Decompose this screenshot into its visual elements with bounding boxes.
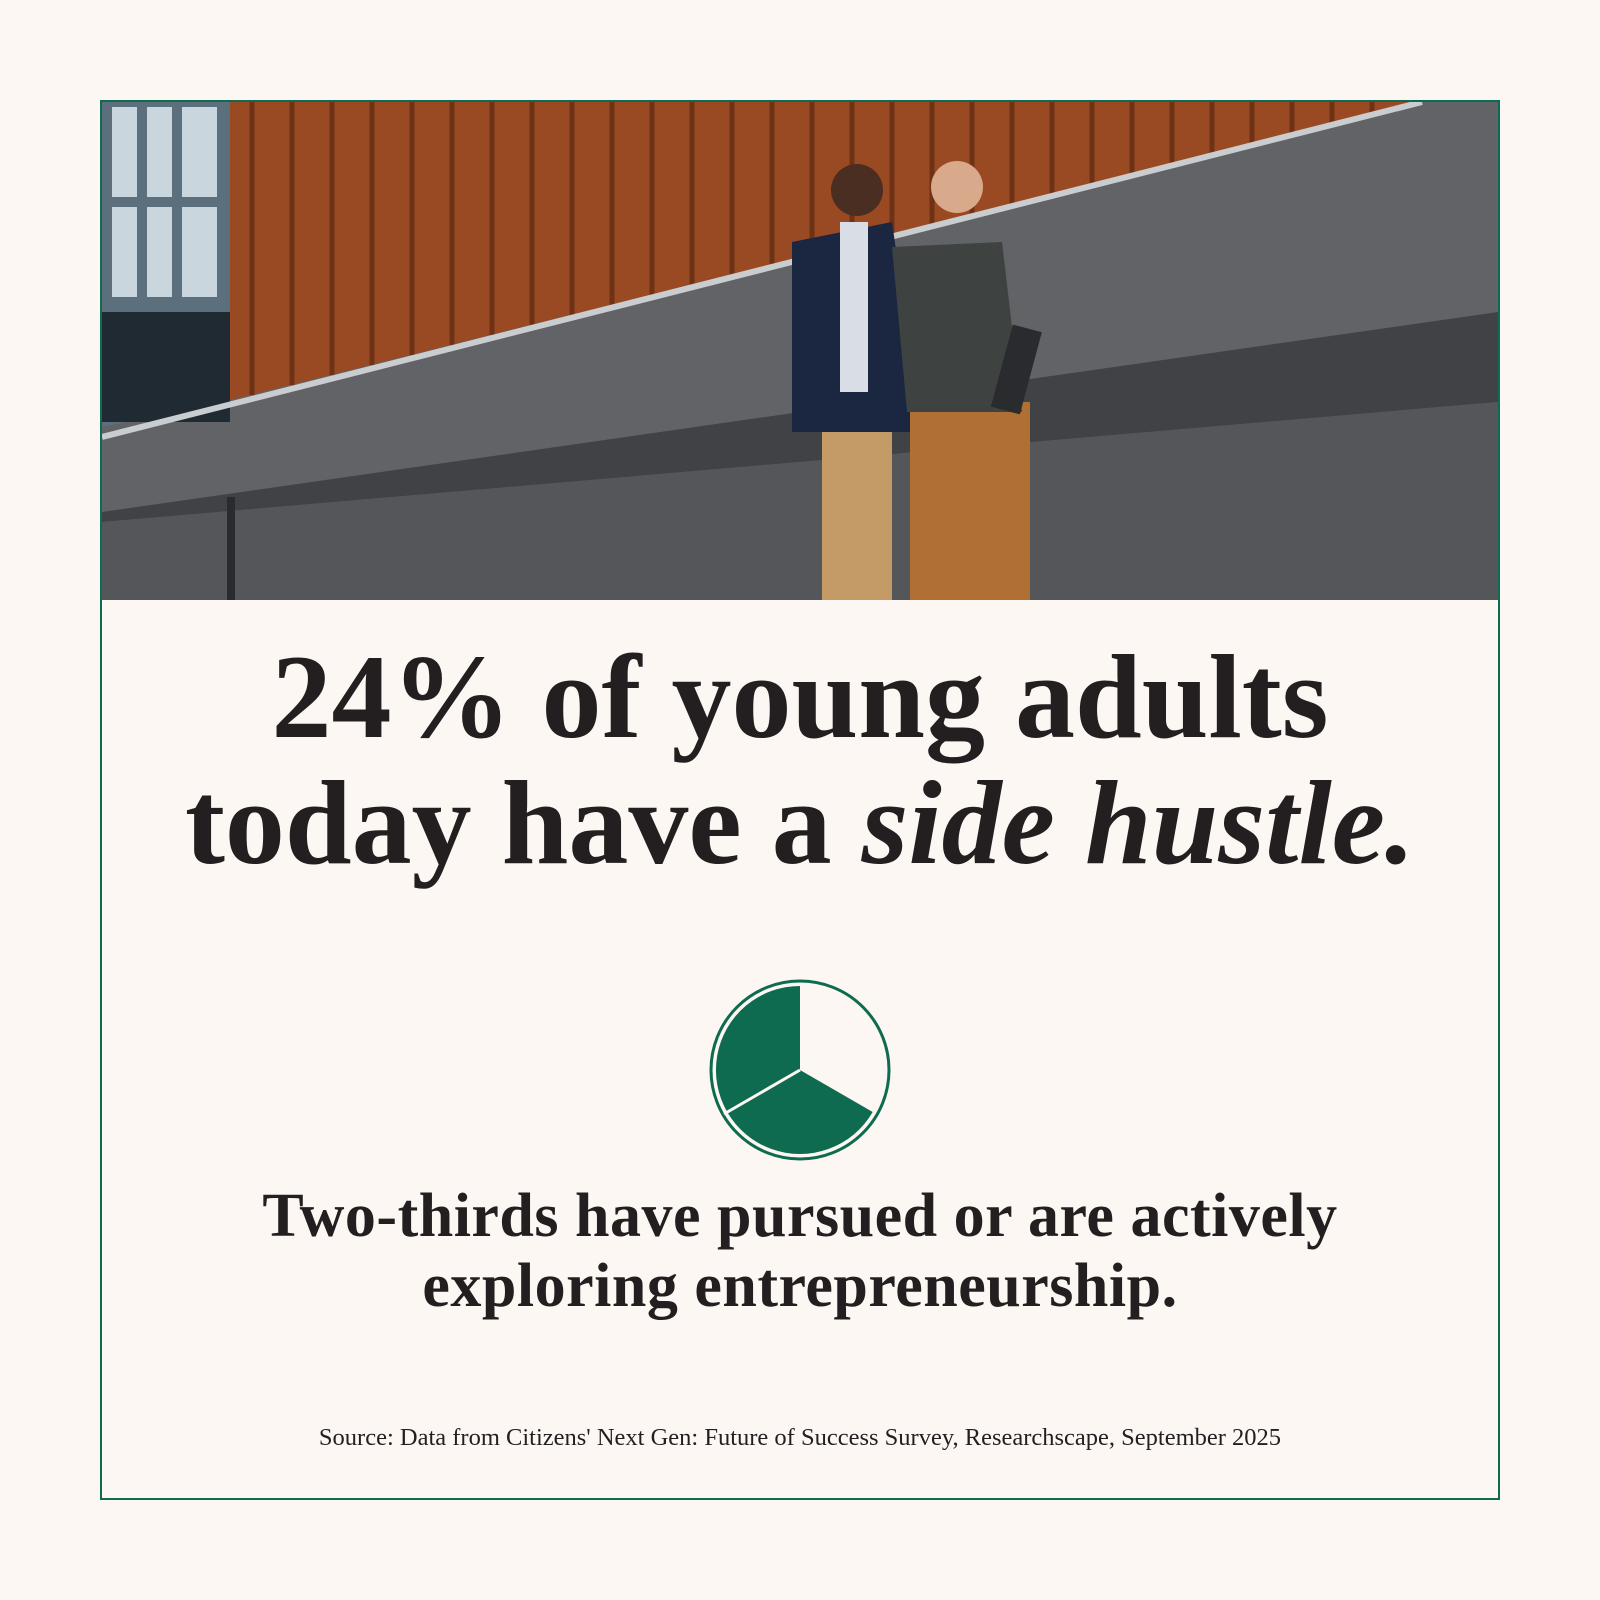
title — [185, 630, 1415, 889]
title: 24% of young adults — [272, 630, 1328, 763]
person 1 — [792, 164, 922, 600]
photo: two men walking by building — [102, 102, 1498, 600]
subtitle text — [262, 1182, 1338, 1320]
subtitle text: Two-thirds have pursued or are actively — [262, 1182, 1338, 1250]
panel: framed card — [100, 100, 1500, 1500]
pie chart: two-thirds — [710, 980, 890, 1160]
source note: Source: Data from Citizens' Next Gen: Future of Success Survey, Researchscape, September 2025 — [319, 1424, 1281, 1451]
title: today have a side hustle. — [185, 756, 1415, 889]
person 2 — [892, 161, 1042, 600]
subtitle text: exploring entrepreneurship. — [422, 1252, 1178, 1320]
